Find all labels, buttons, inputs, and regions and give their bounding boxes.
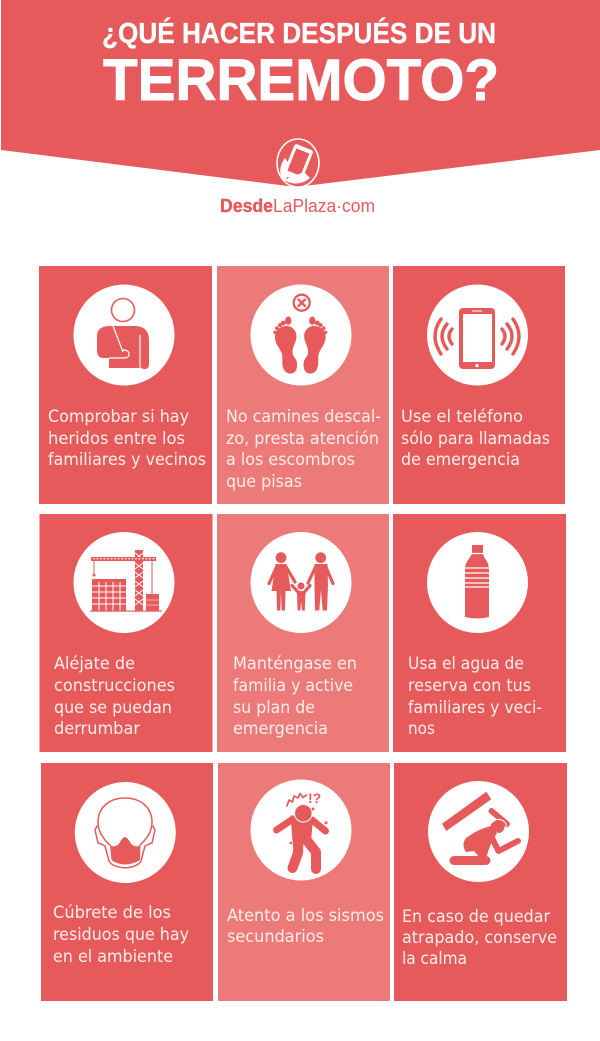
text: la calma	[402, 949, 467, 969]
text: que pisas	[226, 472, 302, 492]
panel: agua	[393, 514, 566, 752]
icon: face mask	[95, 798, 155, 868]
text	[233, 654, 357, 739]
text	[401, 407, 550, 470]
text	[227, 906, 384, 947]
panel: construcciones	[40, 514, 212, 752]
text	[408, 654, 542, 739]
panel: residuos	[41, 763, 213, 1001]
text: Aléjate de	[54, 654, 135, 674]
icon: family holding hands	[269, 552, 333, 610]
icon: vibrating phone	[435, 308, 519, 369]
icon: building and crane	[90, 550, 162, 612]
text: heridos entre los	[48, 429, 185, 449]
text: que se puedan	[54, 698, 172, 718]
text: construcciones	[54, 676, 175, 696]
text: No camines descal-	[226, 407, 381, 427]
header banner	[1, 0, 600, 187]
text	[402, 907, 557, 969]
panel: sismos	[218, 763, 390, 1001]
text: familia y active	[233, 676, 353, 696]
icon: hand holding phone	[277, 139, 319, 187]
text: residuos que hay	[53, 925, 189, 945]
text: familiares y veci-	[408, 698, 542, 718]
icon: dizzy person	[276, 790, 328, 869]
icon: person trapped under beam	[442, 792, 518, 860]
text	[48, 407, 206, 470]
wordmark: Desde	[220, 195, 273, 216]
text: familiares y vecinos	[48, 450, 206, 470]
panel: descalzo	[217, 266, 389, 504]
logo	[220, 139, 375, 216]
title	[102, 16, 499, 113]
panel: atrapado	[394, 763, 567, 1001]
text: reserva con tus	[408, 676, 531, 696]
text: su plan de	[233, 698, 315, 718]
panel: teléfono	[393, 266, 565, 504]
icon: bare feet with cross	[273, 295, 327, 374]
text: En caso de quedar	[402, 907, 551, 927]
text: atrapado, conserve	[402, 928, 557, 948]
text: emergencia	[233, 719, 328, 739]
icon: water bottle	[464, 545, 490, 618]
title: TERREMOTO?	[103, 48, 499, 113]
text	[226, 407, 381, 492]
text: Cúbrete de los	[53, 903, 171, 923]
wordmark: LaPlaza·com	[273, 195, 375, 216]
text: a los escombros	[226, 450, 355, 470]
panel: familia	[217, 514, 389, 752]
text	[53, 903, 189, 967]
text: Comprobar si hay	[48, 407, 189, 427]
text: Manténgase en	[233, 654, 357, 674]
wordmark	[220, 195, 375, 216]
text: Use el teléfono	[401, 407, 523, 427]
text: Atento a los sismos	[227, 906, 384, 926]
text: Usa el agua de	[408, 654, 524, 674]
text: zo, presta atención	[226, 429, 379, 449]
text: secundarios	[227, 927, 324, 947]
panel: heridos	[39, 266, 212, 504]
text	[54, 654, 175, 739]
text: nos	[408, 719, 435, 739]
title: ¿QUÉ HACER DESPUÉS DE UN	[102, 16, 496, 50]
icon: dizzy person: !?	[308, 790, 321, 806]
text: sólo para llamadas	[401, 429, 550, 449]
text: de emergencia	[401, 450, 520, 470]
icon: injured person	[97, 298, 149, 369]
text: derrumbar	[54, 719, 141, 739]
text: en el ambiente	[53, 947, 173, 967]
